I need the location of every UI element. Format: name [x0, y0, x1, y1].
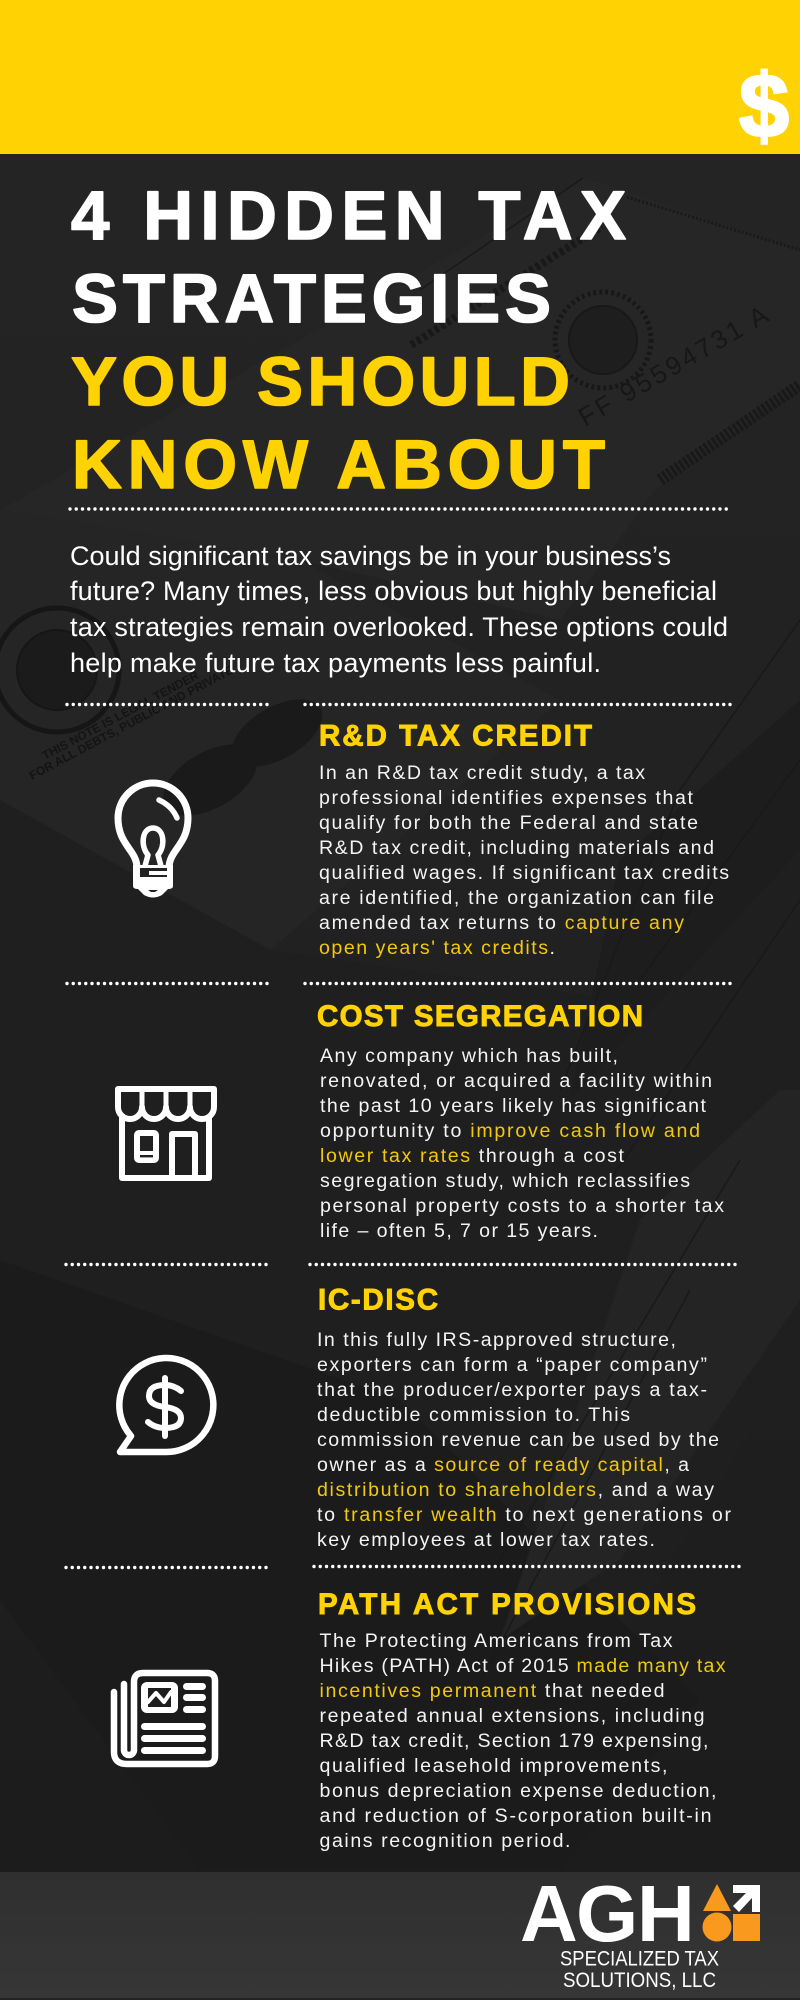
panel: cost segregation	[118, 1000, 724, 1242]
body text: exporters can form a “paper company”	[317, 1354, 707, 1376]
title: 4 HIDDEN TAX	[71, 177, 626, 254]
top yellow banner	[0, 0, 800, 154]
body text: life – often 5, 7 or 15 years.	[320, 1220, 598, 1242]
body text: deductible commission to. This	[317, 1404, 630, 1426]
title: KNOW ABOUT	[72, 426, 605, 503]
icon: dollar speech bubble	[119, 1358, 213, 1452]
body text: are identified, the organization can file	[319, 887, 714, 909]
logo: AGH Specialized Tax Solutions	[520, 1869, 760, 1992]
background: dark money photo: FF 95594731 A	[573, 298, 776, 432]
title: YOU SHOULD	[71, 343, 570, 420]
body text: to transfer wealth to next generations or	[317, 1504, 731, 1526]
body text: the past 10 years likely has significant	[320, 1095, 707, 1117]
body text: open years' tax credits.	[319, 937, 555, 959]
body text: and reduction of S-corporation built-in	[320, 1805, 712, 1827]
intro text: help make future tax payments less painful.	[70, 648, 601, 678]
icon: dollar sign: $	[739, 57, 789, 157]
panel: R&D tax credit	[118, 720, 729, 959]
body text	[317, 1329, 731, 1551]
icon: storefront	[118, 1089, 214, 1178]
icon: light bulb	[118, 783, 188, 898]
body text: repeated annual extensions, including	[320, 1705, 704, 1727]
background: dark money photo: FOR ALL DEBTS, PUBLIC AND PRIVATE	[27, 663, 236, 783]
body text: that the producer/exporter pays a tax-	[317, 1379, 707, 1401]
body text: In an R&D tax credit study, a tax	[319, 762, 645, 784]
intro text: tax strategies remain overlooked. These options could	[70, 612, 728, 642]
body text: gains recognition period.	[320, 1830, 570, 1852]
intro text: Could significant tax savings be in your business’s	[70, 541, 671, 571]
background: dark money photo: THIS NOTE IS LEGAL TENDER	[40, 668, 201, 763]
body text: qualified wages. If significant tax credits	[319, 862, 729, 884]
body text: R&D tax credit, including materials and	[319, 837, 714, 859]
intro text: future? Many times, less obvious but highly beneficial	[70, 576, 717, 606]
body text: segregation study, which reclassifies	[320, 1170, 690, 1192]
panel: IC-DISC	[119, 1284, 731, 1551]
body text: The Protecting Americans from Tax	[320, 1630, 673, 1652]
intro text	[70, 541, 728, 678]
body text: key employees at lower tax rates.	[317, 1529, 655, 1551]
heading: PATH ACT PROVISIONS	[318, 1588, 696, 1621]
body text: distribution to shareholders, and a way	[317, 1479, 714, 1501]
icon: newspaper	[114, 1673, 215, 1764]
heading: IC-DISC	[318, 1284, 438, 1316]
body text	[320, 1630, 726, 1852]
body text: Hikes (PATH) Act of 2015 made many tax	[320, 1655, 726, 1677]
logo: AGH Specialized Tax Solutions: SPECIALIZED TAX	[560, 1948, 719, 1970]
body text: commission revenue can be used by the	[317, 1429, 719, 1451]
body text: lower tax rates through a cost	[320, 1145, 625, 1167]
logo: AGH Specialized Tax Solutions: AGH	[520, 1869, 695, 1958]
seal: treasury	[555, 292, 651, 388]
body text: incentives permanent that needed	[320, 1680, 664, 1702]
title: STRATEGIES	[72, 260, 551, 337]
body text	[320, 1045, 724, 1242]
body text: Any company which has built,	[320, 1045, 618, 1067]
footer band	[0, 1872, 800, 1998]
body text: renovated, or acquired a facility within	[320, 1070, 712, 1092]
body text: opportunity to improve cash flow and	[320, 1120, 700, 1142]
body text: qualify for both the Federal and state	[319, 812, 698, 834]
title	[71, 177, 626, 503]
logo shapes	[702, 1884, 760, 1942]
body text: professional identifies expenses that	[319, 787, 694, 809]
seal: federal reserve	[0, 608, 119, 732]
body text: personal property costs to a shorter tax	[320, 1195, 724, 1217]
panel: PATH Act provisions	[114, 1588, 726, 1852]
body text	[319, 762, 729, 959]
heading: COST SEGREGATION	[317, 1000, 643, 1033]
body text: qualified leasehold improvements,	[320, 1755, 668, 1777]
heading: R&D TAX CREDIT	[319, 720, 592, 752]
logo: AGH Specialized Tax Solutions: SOLUTIONS, LLC	[563, 1969, 716, 1992]
body text: bonus depreciation expense deduction,	[320, 1780, 716, 1802]
body text: amended tax returns to capture any	[319, 912, 684, 934]
body text: In this fully IRS-approved structure,	[317, 1329, 676, 1351]
body text: R&D tax credit, Section 179 expensing,	[320, 1730, 708, 1752]
body text: owner as a source of ready capital, a	[317, 1454, 689, 1476]
